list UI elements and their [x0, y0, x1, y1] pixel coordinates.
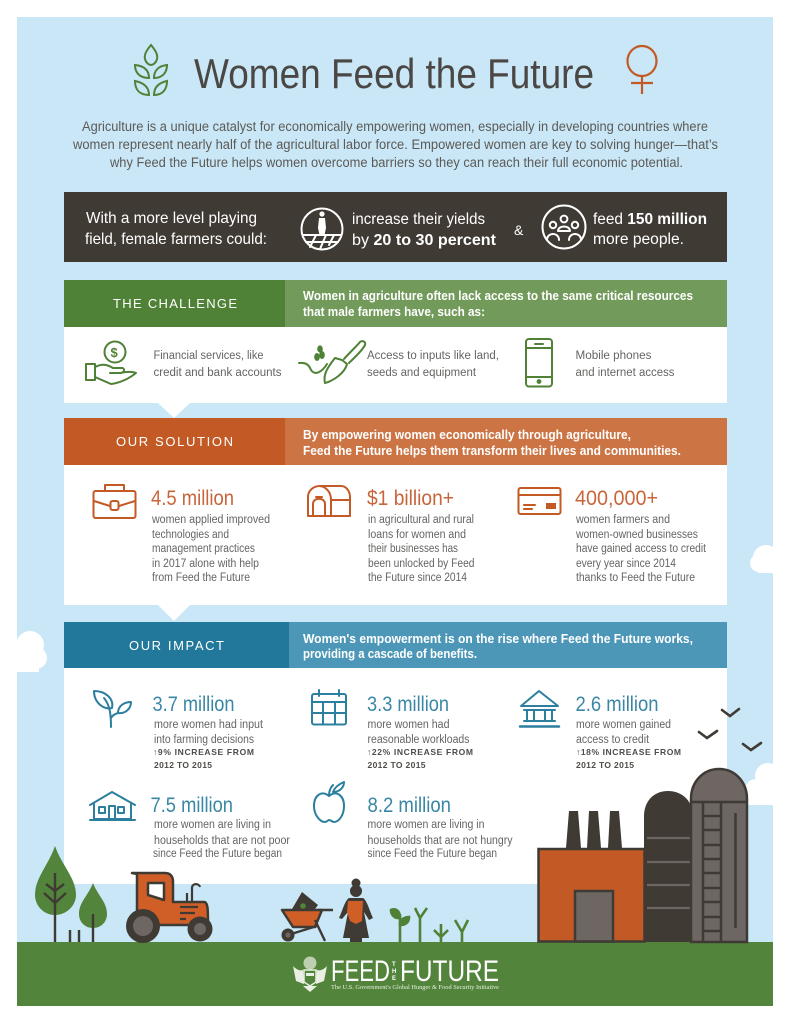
icon: hand and coin: $ — [110, 345, 118, 360]
mobile text: Mobile phones — [576, 350, 652, 362]
impact summary: providing a cascade of benefits. — [303, 647, 477, 661]
stat: 2.6 million: 2012 TO 2015 — [576, 760, 634, 770]
solution heading: OUR SOLUTION — [116, 434, 233, 449]
stat: 400,000+ — [575, 487, 707, 584]
inputs text — [367, 350, 499, 379]
icon: bank building — [520, 691, 559, 726]
stat: 3.7 million: into farming decisions — [154, 734, 254, 746]
stat: 1 billion — [367, 487, 474, 584]
stat: 2.6 million: ↑18% INCREASE FROM — [576, 747, 681, 757]
logo: Feed the Future — [293, 955, 499, 992]
stat: 3.7 million: more women had input — [154, 719, 264, 731]
stat: 7.5 million: households that are not poor — [154, 835, 290, 847]
dark stat band — [64, 192, 727, 262]
stat: 3.7 million: ↑9% INCREASE FROM — [153, 747, 254, 757]
stat: 8.2 million — [368, 794, 513, 860]
stat: 3.7 million — [152, 693, 264, 770]
band lead text: With a more level playing — [86, 210, 257, 227]
financial text: credit and bank accounts — [154, 367, 282, 379]
stat: 3.3 million: more women had — [368, 719, 450, 731]
stat: 4.5 million: women applied improved — [151, 514, 270, 526]
band lead text: field, female farmers could: — [85, 231, 267, 248]
stat: 400,000+: women-owned businesses — [575, 529, 698, 541]
stat: 400,000+: women farmers and — [575, 514, 670, 526]
solution summary: Feed the Future helps them transform their lives and communities. — [303, 444, 681, 458]
intro text: Agriculture is a unique catalyst for economically empowering women, especially in developing countries where — [82, 119, 708, 134]
band lead text — [85, 210, 267, 248]
illustration: wheelbarrow — [282, 892, 333, 942]
stat: 8.2 million: more women are living in — [368, 819, 484, 831]
icon: seedling — [94, 691, 131, 727]
icon: trowel and seeds — [299, 341, 365, 383]
ground — [17, 942, 773, 1006]
mobile text: and internet access — [576, 367, 675, 379]
people text: feed 150 million — [593, 211, 707, 228]
impact summary — [303, 632, 693, 661]
icon: wheat — [135, 45, 167, 95]
intro text: women represent nearly half of the agricultural labor force. Empowered women are key to solving hunger—that’s — [72, 137, 718, 152]
illustration: woman farmer — [339, 878, 373, 942]
stat: 8.2 million: since Feed the Future began — [368, 848, 497, 860]
stat: 3.3 million: 2012 TO 2015 — [368, 760, 426, 770]
financial text: Financial services, like — [154, 350, 264, 362]
stat: 4.5 million: technologies and — [152, 529, 229, 541]
clouds — [16, 545, 781, 805]
icon: briefcase — [94, 485, 136, 518]
stat: 400,000+: every year since 2014 — [576, 558, 677, 570]
impact summary: Women's empowerment is on the rise where Feed the Future works, — [303, 632, 693, 646]
illustration: sprouts — [391, 908, 468, 942]
stat: 7.5 million: since Feed the Future began — [153, 848, 282, 860]
ampersand: & — [514, 222, 524, 238]
stat: 2.6 million: 2.6 million — [576, 693, 658, 716]
illustration: trees — [35, 846, 107, 942]
stat: 7.5 million: 7.5 million — [150, 794, 233, 817]
icon: hand and coin — [86, 342, 136, 384]
yields text — [352, 211, 496, 249]
icon: greenhouse barn — [308, 486, 350, 516]
logo wordmark: FEED — [331, 955, 390, 988]
intro text: why Feed the Future helps women overcome barriers so they can reach their full economic potential. — [109, 155, 683, 170]
stat: 3.3 million: 3.3 million — [367, 693, 449, 716]
challenge summary — [303, 289, 693, 319]
stat: 4.5 million: management practices — [152, 543, 255, 555]
icon: credit card — [518, 488, 560, 514]
stat: 3.3 million: ↑22% INCREASE FROM — [367, 747, 473, 757]
stat: 1 billion: their businesses has — [368, 543, 458, 555]
mobile text — [576, 350, 675, 379]
stat: 3.3 million — [367, 693, 473, 770]
stat: 4.5 million: from Feed the Future — [152, 572, 250, 584]
stat: 3.7 million: 2012 TO 2015 — [154, 760, 212, 770]
stat: 1 billion: been unlocked by Feed — [368, 558, 474, 570]
intro text — [72, 119, 718, 170]
impact heading: OUR IMPACT — [129, 638, 224, 653]
stat: 4.5 million — [151, 487, 270, 584]
logo wordmark 2: FUTURE — [400, 955, 499, 988]
people text — [593, 211, 707, 248]
stat: 4.5 million: in 2017 alone with help — [152, 558, 259, 570]
icon: farmer in field — [302, 208, 342, 250]
stat: 7.5 million — [150, 794, 290, 860]
stat: 400,000+: thanks to Feed the Future — [576, 572, 695, 584]
logo seal — [293, 956, 327, 992]
panel: our solution — [64, 418, 727, 621]
logo small stacked word: T — [392, 962, 396, 968]
yields text: by 20 to 30 percent — [352, 232, 496, 249]
financial text — [154, 350, 282, 379]
challenge summary: Women in agriculture often lack access to the same critical resources — [303, 289, 693, 303]
stat: 1 billion: the Future since 2014 — [368, 572, 468, 584]
stat: 7.5 million: more women are living in — [154, 819, 271, 831]
icon: birds — [699, 709, 761, 750]
icon: house — [90, 792, 135, 820]
challenge summary: that male farmers have, such as: — [303, 305, 485, 319]
icon: apple — [314, 782, 344, 822]
inputs text: seeds and equipment — [367, 367, 477, 379]
logo small stacked word — [392, 962, 396, 982]
inputs text: Access to inputs like land, — [367, 350, 499, 362]
yields text: increase their yields — [352, 211, 485, 228]
logo small stacked word: H — [392, 969, 396, 975]
stat: 3.7 million: 3.7 million — [152, 693, 234, 716]
icon: mobile phone — [526, 339, 552, 386]
stat: 2.6 million: more women gained — [576, 719, 671, 731]
icon: group of people — [542, 206, 586, 248]
illustration: factory and silos — [538, 769, 747, 942]
panel: the challenge — [64, 280, 727, 418]
stat: 2.6 million — [576, 693, 681, 770]
people text: more people. — [593, 231, 684, 248]
stat: 1 billion: loans for women and — [368, 529, 466, 541]
stat: 3.3 million: reasonable workloads — [368, 734, 470, 746]
stat: 8.2 million: 8.2 million — [368, 794, 451, 817]
stat: 400,000+: have gained access to credit — [576, 543, 707, 555]
solution summary — [303, 428, 681, 458]
stat: 8.2 million: households that are not hungry — [368, 835, 513, 847]
stat: 4.5 million: 4.5 million — [151, 487, 234, 510]
icon: calendar — [312, 690, 346, 724]
logo tagline: The U.S. Government's Global Hunger & Food Security Initiative — [331, 984, 499, 991]
illustration: tractor — [126, 873, 212, 943]
stat: 1 billion: $1 billion+ — [367, 487, 454, 510]
logo small stacked word: E — [392, 976, 396, 982]
stat: 400,000+: 400,000+ — [575, 487, 658, 510]
title: Women Feed the Future — [194, 50, 594, 97]
stat: 2.6 million: access to credit — [576, 734, 650, 746]
challenge heading: THE CHALLENGE — [113, 296, 237, 311]
stat: 1 billion: in agricultural and rural — [368, 514, 474, 526]
panel: our impact — [64, 622, 727, 884]
solution summary: By empowering women economically through agriculture, — [303, 428, 631, 442]
icon: female symbol — [628, 46, 656, 94]
